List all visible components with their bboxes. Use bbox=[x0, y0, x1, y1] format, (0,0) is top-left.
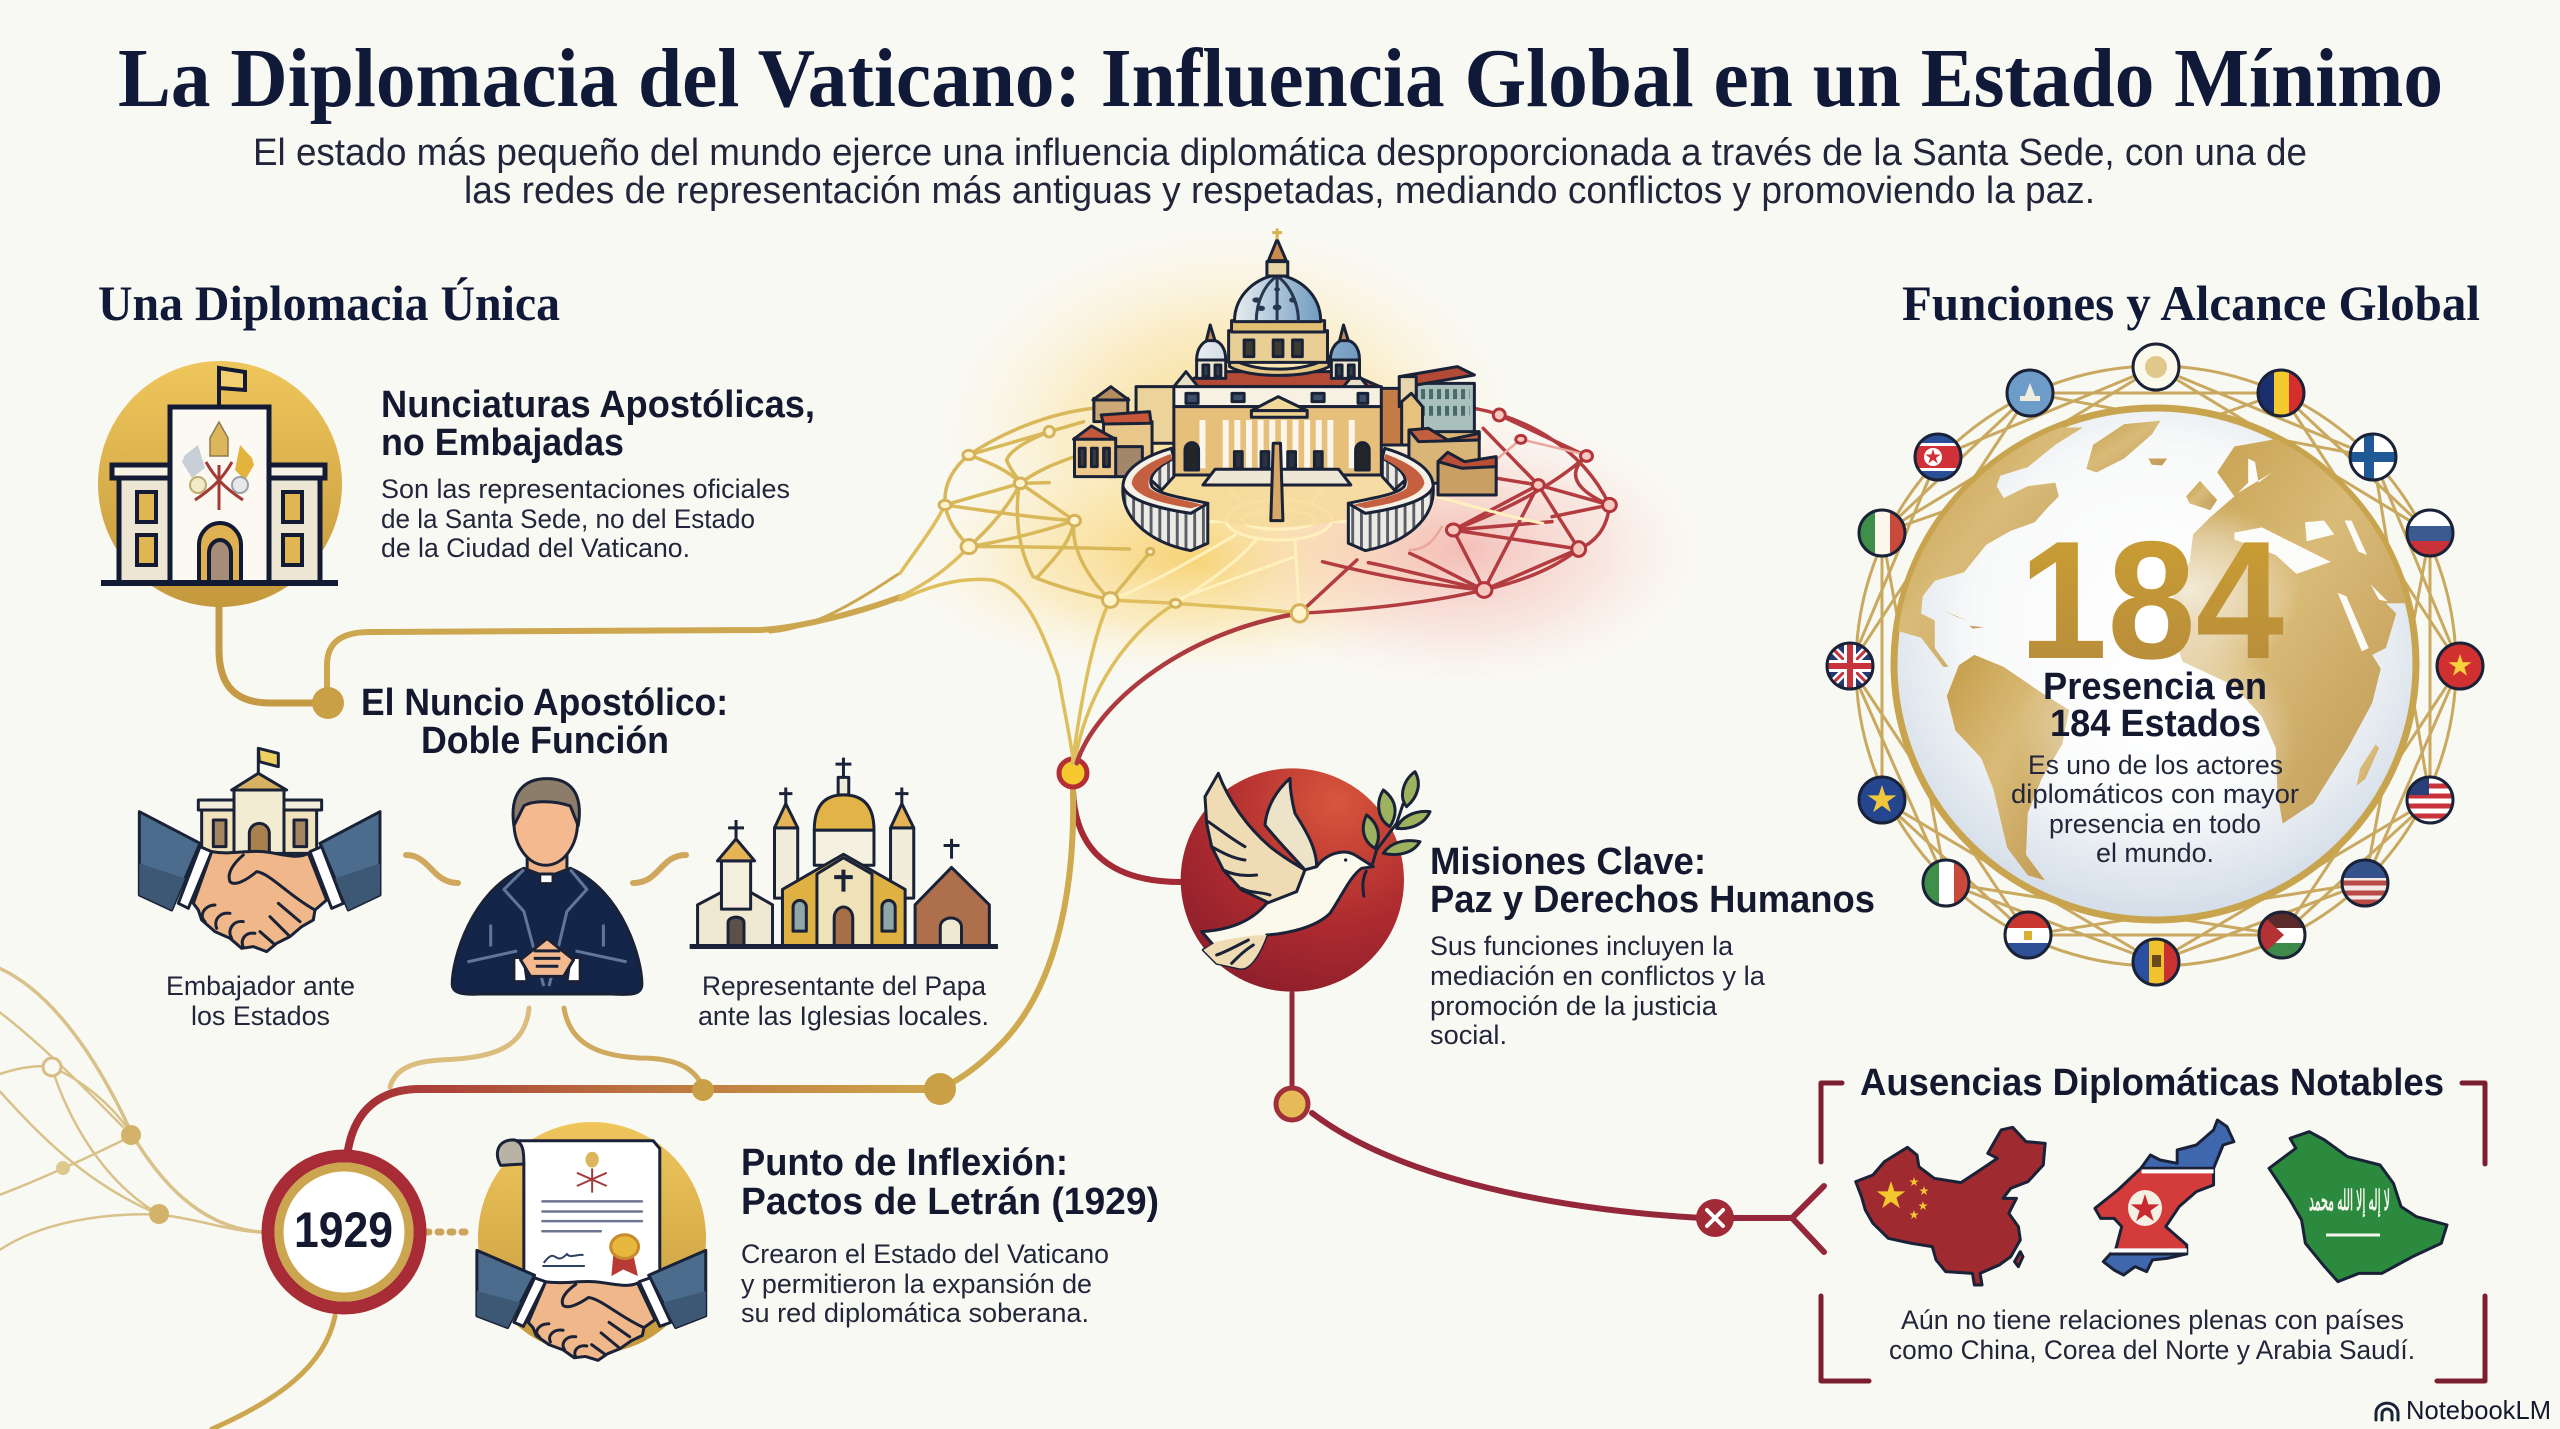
olive branch bbox=[1363, 772, 1430, 897]
label: ambassador bbox=[166, 971, 355, 1031]
panel: notable absences bbox=[1821, 1062, 2485, 1381]
colonnades bbox=[1123, 448, 1208, 551]
icon: treaty document with handshake bbox=[477, 1122, 706, 1360]
text: misiones clave: promoción de la justicia bbox=[1430, 991, 1718, 1021]
dove wings and body bbox=[1202, 773, 1373, 968]
globe bbox=[1894, 408, 2416, 920]
network nodes bbox=[939, 426, 1308, 622]
icon: state building and handshake bbox=[139, 748, 380, 952]
flag: light blue emblem bbox=[2007, 370, 2053, 416]
piazza bbox=[1162, 447, 1394, 527]
flag: Vatican style bbox=[2133, 344, 2179, 390]
red link from central node bbox=[1077, 613, 1300, 763]
text: misiones clave: Sus funciones incluyen la bbox=[1430, 931, 1734, 961]
badge: 1929 bbox=[268, 1156, 420, 1308]
flag: Palestine bbox=[2259, 912, 2305, 958]
subtitle bbox=[253, 132, 2307, 212]
text: presencia: Es uno de los actores bbox=[2028, 750, 2283, 780]
flag: Vietnam bbox=[2437, 643, 2483, 689]
subtitle: El estado más pequeño del mundo ejerce una influencia diplomática desproporcionada a través de la Santa Sede, con una de bbox=[253, 132, 2307, 174]
network: fading red links bbox=[1410, 439, 1580, 550]
Madagascar bbox=[2357, 744, 2379, 786]
map emblem: North Korea bbox=[2128, 1190, 2162, 1226]
basilica main body bbox=[1174, 372, 1381, 485]
label: pope representative bbox=[698, 971, 989, 1031]
flag: blue with sun bbox=[1859, 777, 1905, 823]
text: presencia: 184 Estados bbox=[2050, 703, 2261, 745]
text: nunciaturas: Son las representaciones oficiales bbox=[381, 474, 790, 504]
text: nunciaturas bbox=[381, 384, 815, 563]
flag: Italy upper bbox=[1859, 510, 1905, 556]
network web around the basilica bbox=[900, 408, 1616, 763]
map: North Korea bbox=[2095, 1120, 2234, 1275]
flag rings bbox=[1850, 366, 2460, 966]
seas bbox=[2234, 459, 2388, 651]
text: misiones clave: mediación en conflictos y la bbox=[1430, 961, 1766, 991]
connector lines bbox=[212, 573, 1824, 1429]
flag: blue yellow red with emblem bbox=[2133, 939, 2179, 985]
title: La Diplomacia del Vaticano: Influencia Global en un Estado Mínimo bbox=[118, 32, 2443, 125]
text: nunciaturas: no Embajadas bbox=[381, 422, 624, 464]
globe network with flags bbox=[1827, 344, 2483, 985]
text: presencia: el mundo. bbox=[2096, 838, 2214, 868]
network: lower fan to the central node bbox=[900, 505, 1300, 763]
text: pactos de letran: y permitieron la expansión de bbox=[741, 1269, 1092, 1299]
heading: nuncio bbox=[361, 682, 728, 762]
subtitle: las redes de representación más antiguas y respetadas, mediando conflictos y promoviendo la paz. bbox=[464, 170, 2095, 212]
icon: dove of peace bbox=[1181, 768, 1430, 992]
text: pactos de letran bbox=[741, 1142, 1159, 1328]
flag: Paraguay bbox=[2005, 912, 2051, 958]
Greenland and Iceland bbox=[2086, 421, 2167, 472]
text: presencia: diplomáticos con mayor bbox=[2011, 779, 2299, 809]
text: pactos de letran: Crearon el Estado del Vaticano bbox=[741, 1239, 1109, 1269]
text: nunciaturas: Nunciaturas Apostólicas, bbox=[381, 384, 815, 426]
South America bbox=[1947, 655, 2069, 880]
flag: North Korea bbox=[1915, 434, 1961, 480]
basilica drum and domes bbox=[1197, 228, 1359, 378]
map: Saudi Arabia bbox=[2269, 1132, 2447, 1282]
text: absences second line: como China, Corea del Norte y Arabia Saudí. bbox=[1889, 1335, 2415, 1365]
network glow bbox=[890, 220, 1710, 690]
label: ambassador: Embajador ante bbox=[166, 971, 355, 1001]
text: misiones clave: Paz y Derechos Humanos bbox=[1430, 879, 1875, 921]
basilica side buildings bbox=[1074, 367, 1496, 495]
text: presencia: Presencia en bbox=[2043, 666, 2267, 708]
text: presencia: presencia en todo bbox=[2049, 809, 2261, 839]
stat: 184: 184 bbox=[2019, 506, 2284, 694]
North America bbox=[1893, 428, 2083, 667]
obelisk bbox=[1271, 443, 1283, 521]
Eurasia and Africa bbox=[2166, 438, 2413, 824]
heading: left section: Una Diplomacia Única bbox=[98, 275, 560, 331]
icon: churches bbox=[690, 758, 998, 947]
heading: Ausencias Diplomáticas Notables bbox=[1860, 1062, 2444, 1104]
flag: Russia bbox=[2407, 510, 2453, 556]
text: misiones clave bbox=[1430, 841, 1875, 1050]
text: misiones clave: social. bbox=[1430, 1020, 1507, 1050]
flag: Finland bbox=[2350, 434, 2396, 480]
watermark: NotebookLM bbox=[2406, 1395, 2551, 1425]
map stars: China bbox=[1877, 1177, 1929, 1219]
connector nodes bbox=[43, 687, 1734, 1237]
bracket frame bbox=[1821, 1083, 2485, 1381]
map: China bbox=[1856, 1127, 2045, 1285]
network: piazza lines bbox=[1120, 490, 1543, 613]
label: ambassador: los Estados bbox=[191, 1001, 330, 1031]
heading: nuncio: El Nuncio Apostólico: bbox=[361, 682, 728, 724]
heading: nuncio: Doble Función bbox=[421, 720, 669, 762]
network: red half bbox=[1300, 408, 1609, 613]
panel: notable absences: لا إله إلا الله محمد bbox=[2309, 1185, 2390, 1218]
map inscription: Saudi Arabia bbox=[2309, 1185, 2390, 1235]
left faded network bbox=[0, 968, 262, 1250]
label: pope representative: Representante del Papa bbox=[702, 971, 987, 1001]
flag: stripes and blue bbox=[2342, 860, 2388, 906]
flag: USA bbox=[2407, 777, 2453, 823]
label: pope representative: ante las Iglesias locales. bbox=[698, 1001, 989, 1031]
flag: tricolor blue yellow red bbox=[2258, 370, 2304, 416]
icon: nunciature building bbox=[98, 361, 342, 607]
text: misiones clave: Misiones Clave: bbox=[1430, 841, 1706, 883]
text: pactos de letran: Punto de Inflexión: bbox=[741, 1142, 1068, 1184]
text: nunciaturas: de la Santa Sede, no del Estado bbox=[381, 504, 755, 534]
heading: right section: Funciones y Alcance Global bbox=[1902, 275, 2480, 331]
text: presencia bbox=[2011, 666, 2299, 868]
British Isles bbox=[2186, 481, 2217, 510]
central illustration: St Peter's Basilica bbox=[1074, 228, 1496, 551]
icon: papal coat of arms bbox=[182, 422, 254, 510]
flag: Italy lower bbox=[1923, 860, 1969, 906]
text: pactos de letran: su red diplomática soberana. bbox=[741, 1298, 1089, 1328]
text: nunciaturas: de la Ciudad del Vaticano. bbox=[381, 533, 690, 563]
icon: nuncio figure bbox=[452, 779, 642, 994]
badge: 1929: 1929 bbox=[294, 1202, 393, 1258]
text: pactos de letran: Pactos de Letrán (1929) bbox=[741, 1181, 1159, 1223]
flag: United Kingdom bbox=[1827, 643, 1873, 689]
text: absences: Aún no tiene relaciones plenas con países bbox=[1901, 1305, 2404, 1335]
network: gold half bbox=[945, 408, 1150, 600]
